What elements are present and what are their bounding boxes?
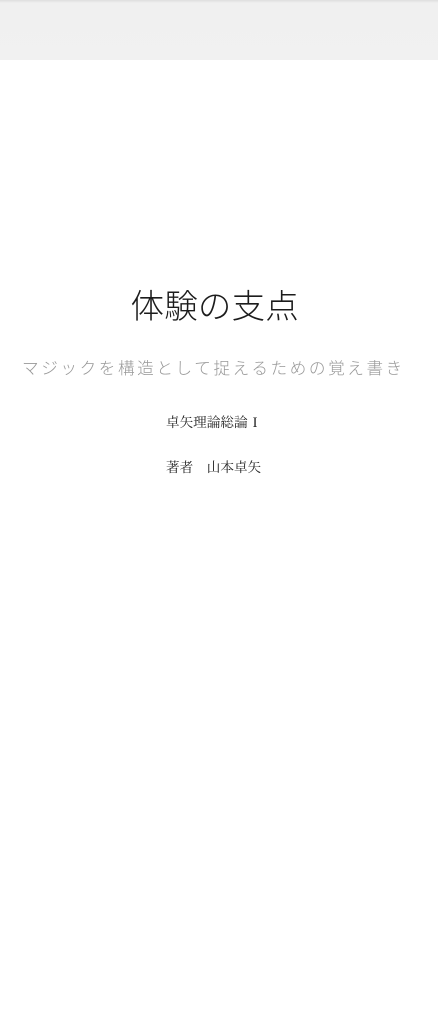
top header band bbox=[0, 0, 438, 60]
subtitle: マジックを構造として捉えるための覚え書き bbox=[22, 359, 405, 378]
series name: 卓矢理論総論 I bbox=[166, 415, 257, 431]
author: 著者 山本卓矢 bbox=[166, 460, 261, 475]
title: 体験の支点 bbox=[130, 289, 299, 326]
